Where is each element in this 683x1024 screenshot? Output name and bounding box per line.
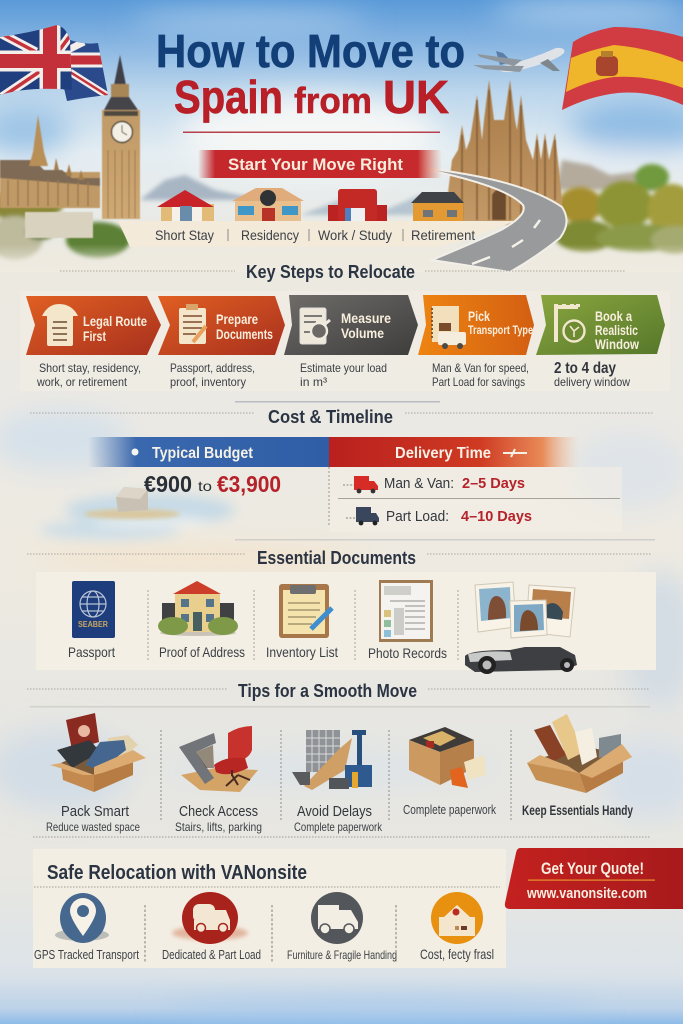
step 5: book a window: Window <box>595 336 639 352</box>
feature: cost and safety: Cost, fecty frasl <box>420 946 494 962</box>
step 2: prepare documents: Prepare <box>216 311 258 327</box>
title: UK <box>383 71 449 123</box>
step 1: legal route: Legal Route <box>83 313 147 329</box>
step descriptions: Passport, address, <box>170 361 255 375</box>
car <box>465 647 600 674</box>
step 2: prepare documents <box>158 296 285 355</box>
step 2: prepare documents: Documents <box>216 326 273 342</box>
tip: pack smart: Reduce wasted space <box>46 820 140 834</box>
step descriptions: Short stay, residency, <box>39 361 141 375</box>
houses row <box>157 188 464 221</box>
step descriptions: in m³ <box>300 375 327 389</box>
trees: right <box>555 164 683 254</box>
step 4: pick transport type: Pick <box>468 308 490 324</box>
feature: cost and safety <box>420 892 494 962</box>
feature: furniture and fragile handling <box>287 892 397 962</box>
tip: pack smart <box>46 713 146 834</box>
row: man and van: 2–5 Days <box>462 475 525 492</box>
passport: SEABER <box>78 620 108 629</box>
mountains <box>140 160 660 215</box>
photo prints <box>475 582 575 638</box>
header: delivery time <box>329 437 580 467</box>
tip: avoid delays: Complete paperwork <box>294 820 383 834</box>
feature: GPS tracking <box>34 893 139 962</box>
budget figure <box>144 471 281 497</box>
budget figure: €900 <box>144 471 192 497</box>
panel: step chevrons <box>20 291 670 391</box>
icon: work building <box>328 189 387 221</box>
header: typical budget <box>88 437 329 467</box>
trees: left <box>0 189 130 260</box>
inventory list <box>266 584 338 660</box>
tip: pack smart: Pack Smart <box>61 803 130 820</box>
Sagrada Familia <box>444 80 562 225</box>
icon: airplane <box>473 48 564 72</box>
icon: document with roof <box>42 304 78 346</box>
illustration: island <box>40 487 235 539</box>
row: part load: Part Load: <box>386 508 449 525</box>
passport: Passport <box>68 644 115 660</box>
step descriptions: work, or retirement <box>36 375 128 389</box>
header: delivery time: Delivery Time <box>395 445 491 462</box>
row: man and van <box>343 475 525 493</box>
photos and car <box>465 582 600 674</box>
row: man and van: Man & Van: <box>384 475 454 492</box>
tip: avoid delays: Avoid Delays <box>297 803 372 820</box>
step 1: legal route: First <box>83 328 106 344</box>
strip: visa categories: Work / Study <box>318 227 392 243</box>
budget figure: to <box>198 478 212 494</box>
title: Spain <box>174 71 283 123</box>
step descriptions: Estimate your load <box>300 361 387 375</box>
step descriptions: delivery window <box>554 375 630 389</box>
hero fade into paper <box>0 244 683 272</box>
step 3: measure volume: Measure <box>341 310 391 326</box>
icon: clipboard and magnifier <box>300 308 330 344</box>
tip: keep essentials handy <box>522 714 633 818</box>
row: part load: 4–10 Days <box>461 508 532 525</box>
panel: cost and timeline <box>40 437 622 539</box>
header: typical budget: Typical Budget <box>152 445 254 462</box>
panel: tips <box>46 713 633 834</box>
icon: open box with books <box>527 714 632 793</box>
icon: Spain flag <box>562 27 683 110</box>
step descriptions <box>36 360 630 389</box>
step descriptions: 2 to 4 day <box>554 360 616 377</box>
icon: building and ramp <box>292 730 372 790</box>
icon: red truck <box>343 476 378 493</box>
strip: visa categories: Residency <box>241 227 299 243</box>
tip: check access: Stairs, lifts, parking <box>175 820 262 834</box>
feature: dedicated and part load: Dedicated & Part Load <box>162 947 261 962</box>
icon: blue truck <box>346 507 379 525</box>
title: How to Move to <box>156 25 465 77</box>
proof of address: Proof of Address <box>159 644 245 660</box>
Big Ben tower <box>102 55 140 219</box>
title: from <box>294 80 372 121</box>
icon: open box <box>50 713 146 792</box>
inventory list: Inventory List <box>266 644 338 660</box>
callout: get your quote <box>505 848 683 909</box>
feature: dedicated and part load <box>162 892 261 962</box>
feature: GPS tracking: GPS Tracked Transport <box>34 947 139 962</box>
feature: furniture and fragile handling: Furniture & Fragile Handing <box>287 948 397 962</box>
callout: get your quote: www.vanonsite.com <box>526 885 647 902</box>
passport <box>68 581 115 660</box>
photo records: Photo Records <box>368 645 447 661</box>
heading: Essential Documents: Essential Documents <box>257 548 416 568</box>
panel: essential documents <box>36 572 656 674</box>
strip: visa categories <box>118 221 515 247</box>
step 3: measure volume <box>284 295 418 355</box>
tip: keep essentials handy: Keep Essentials Handy <box>522 802 633 818</box>
strip: visa categories: Short Stay <box>155 227 214 243</box>
row: part load <box>346 507 532 525</box>
icon: residency house <box>232 188 304 221</box>
icon: short stay house <box>157 190 214 221</box>
icon: calendar clock <box>556 304 584 342</box>
step 5: book a window: Book a <box>595 308 632 324</box>
icon: retirement house <box>411 192 464 221</box>
tip: complete paperwork: Complete paperwork <box>403 802 496 817</box>
title <box>156 25 465 123</box>
step 5: book a window: Realistic <box>595 322 638 338</box>
icon: UK flag <box>0 25 108 101</box>
icon: box with tools <box>409 727 486 788</box>
panel: safe relocation <box>33 849 506 968</box>
step 5: book a window <box>536 295 665 355</box>
road <box>414 167 567 272</box>
icon: chair and stairs <box>179 726 258 792</box>
step descriptions: proof, inventory <box>170 375 246 389</box>
tip: check access <box>175 726 262 834</box>
step 3: measure volume: Volume <box>341 325 384 341</box>
heading: Cost & Timeline: Cost & Timeline <box>268 407 393 427</box>
Westminster building <box>0 115 100 238</box>
heading: Key Steps to Relocate: Key Steps to Relocate <box>246 262 415 282</box>
budget figure: €3,900 <box>217 471 281 497</box>
step 4: pick transport type: Transport Type <box>468 323 533 337</box>
banner: Start Your Move Right: Start Your Move Right <box>228 155 403 174</box>
tip: complete paperwork <box>403 727 496 817</box>
callout: get your quote: Get Your Quote! <box>541 859 644 878</box>
photo records <box>368 580 447 661</box>
banner: Start Your Move Right <box>198 150 442 178</box>
strip: visa categories: Retirement <box>411 227 475 243</box>
icon: checklist <box>179 304 206 344</box>
step 4: pick transport type <box>418 295 534 355</box>
step 1: legal route <box>26 296 161 355</box>
icon: book and van <box>432 306 466 349</box>
heading: Safe Relocation: Safe Relocation with VANonsite <box>47 862 307 884</box>
step descriptions: Part Load for savings <box>432 375 525 389</box>
tip: avoid delays <box>292 730 383 834</box>
proof of address <box>158 581 245 660</box>
heading: Tips for a Smooth Move: Tips for a Smooth Move <box>238 681 417 701</box>
step descriptions: Man & Van for speed, <box>432 361 529 375</box>
tip: check access: Check Access <box>179 803 258 820</box>
